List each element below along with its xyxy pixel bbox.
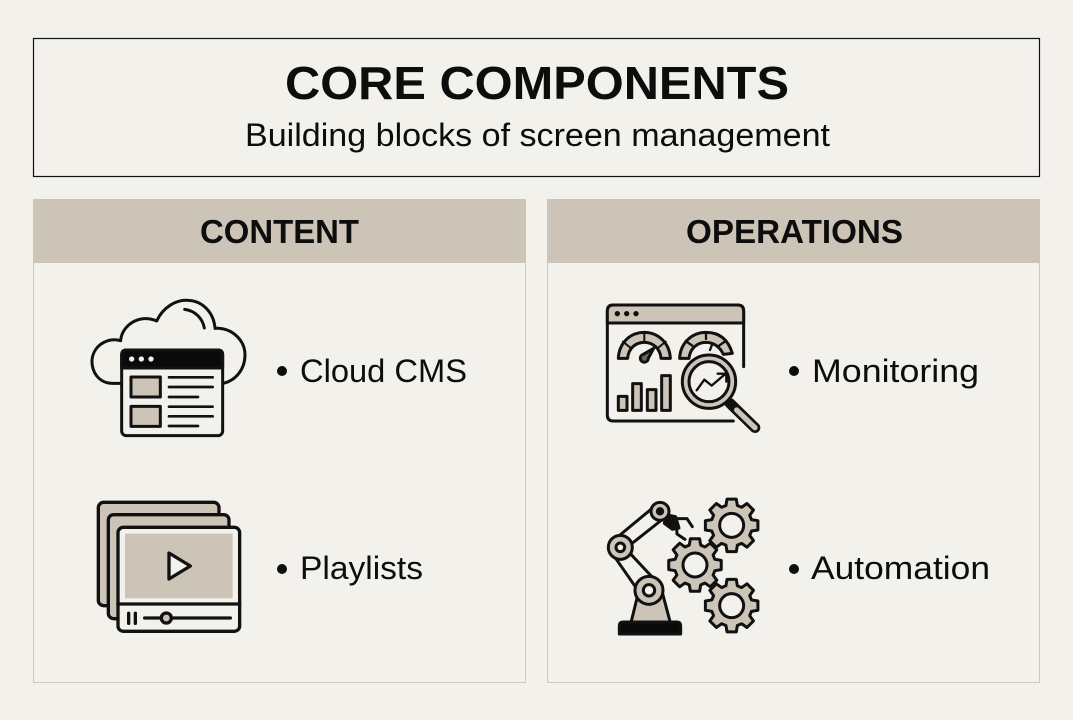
heading: content: CONTENT: [200, 213, 359, 250]
icon: robot arm and gears: [608, 499, 758, 634]
panel: operations: [547, 199, 1040, 682]
icon: video playlists: [98, 502, 240, 631]
gear bottom: [705, 579, 758, 632]
icon: cloud CMS: [92, 300, 245, 436]
gear top: [705, 499, 758, 552]
title: CORE COMPONENTS: [285, 57, 789, 109]
subtitle: Building blocks of screen management: [245, 117, 830, 153]
bullet text: monitoring: Monitoring: [812, 353, 979, 389]
heading: operations: OPERATIONS: [686, 213, 903, 250]
bullet text: cloud CMS: Cloud CMS: [300, 353, 467, 389]
bullet text: playlists: Playlists: [300, 550, 423, 586]
panel: content: [33, 199, 526, 682]
gear middle: [669, 539, 721, 591]
bullet text: automation: Automation: [811, 550, 990, 586]
icon: monitoring dashboard: [607, 305, 755, 428]
title box: [34, 38, 1040, 176]
